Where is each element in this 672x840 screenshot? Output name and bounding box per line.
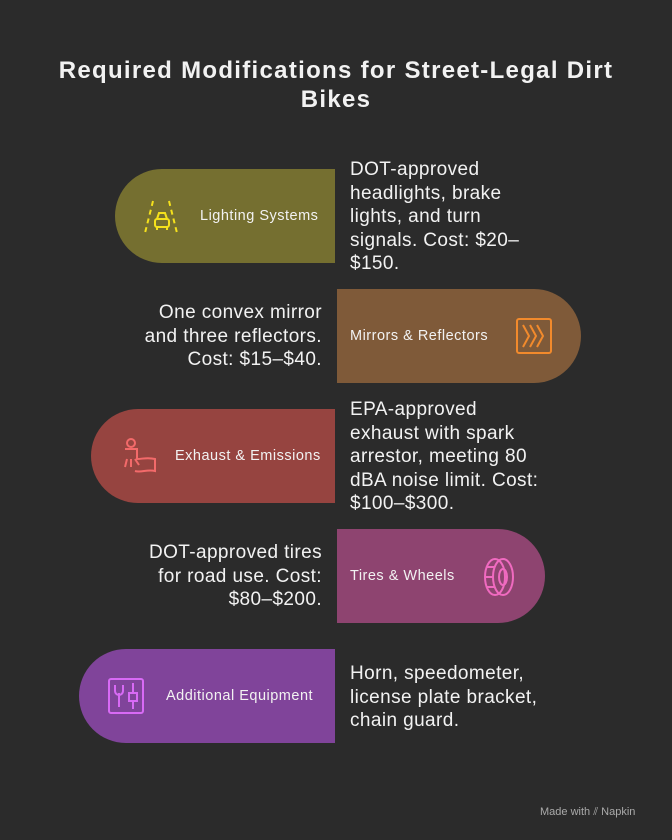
panel: exhaust bbox=[91, 409, 335, 503]
panel: additional bbox=[79, 649, 335, 743]
label: Additional Equipment bbox=[166, 688, 313, 704]
text: exhaust: $100–$300. bbox=[350, 493, 454, 514]
panel: mirrors bbox=[337, 289, 581, 383]
text: tires: for road use. Cost: bbox=[158, 566, 322, 586]
label: Tires & Wheels bbox=[350, 568, 455, 584]
title: Bikes bbox=[301, 86, 371, 113]
icon: tire bbox=[484, 558, 514, 596]
text: tires: $80–$200. bbox=[229, 589, 322, 610]
text: tires: DOT-approved tires bbox=[149, 542, 322, 563]
text: lighting: signals. Cost: $20– bbox=[350, 230, 519, 250]
icon: reflectors bbox=[516, 318, 552, 354]
text: lighting: lights, and turn bbox=[350, 206, 481, 227]
text: additional: license plate bracket, bbox=[350, 686, 537, 708]
icon: exhaust bbox=[124, 438, 156, 472]
footer: Made with ⫽ Napkin bbox=[540, 806, 635, 818]
text: exhaust: arrestor, meeting 80 bbox=[350, 446, 527, 467]
panel: tires bbox=[337, 529, 545, 623]
text: mirrors: Cost: $15–$40. bbox=[188, 349, 322, 370]
label: Lighting Systems bbox=[200, 208, 318, 224]
text: additional: Horn, speedometer, bbox=[350, 663, 524, 684]
panel: lighting bbox=[115, 169, 335, 263]
label: Mirrors & Reflectors bbox=[350, 328, 488, 344]
text: exhaust: exhaust with spark bbox=[350, 422, 515, 444]
icon: tools bbox=[108, 678, 144, 714]
text: exhaust: dBA noise limit. Cost: bbox=[350, 470, 538, 490]
text: mirrors bbox=[145, 302, 322, 370]
text: mirrors: One convex mirror bbox=[159, 302, 322, 323]
text: exhaust bbox=[350, 399, 538, 514]
text: lighting: DOT-approved bbox=[350, 159, 479, 180]
text: mirrors: and three reflectors. bbox=[145, 326, 322, 346]
text: lighting: $150. bbox=[350, 253, 400, 274]
text: lighting bbox=[350, 159, 519, 274]
title: Required Modifications for Street-Legal Dirt bbox=[59, 57, 613, 84]
text: tires bbox=[149, 542, 322, 610]
text: lighting: headlights, brake bbox=[350, 182, 502, 204]
text: exhaust: EPA-approved bbox=[350, 399, 477, 420]
label: Exhaust & Emissions bbox=[175, 448, 321, 464]
icon: road car bbox=[144, 200, 178, 232]
text: additional: chain guard. bbox=[350, 710, 459, 731]
text: additional bbox=[350, 663, 537, 731]
title bbox=[59, 57, 613, 113]
